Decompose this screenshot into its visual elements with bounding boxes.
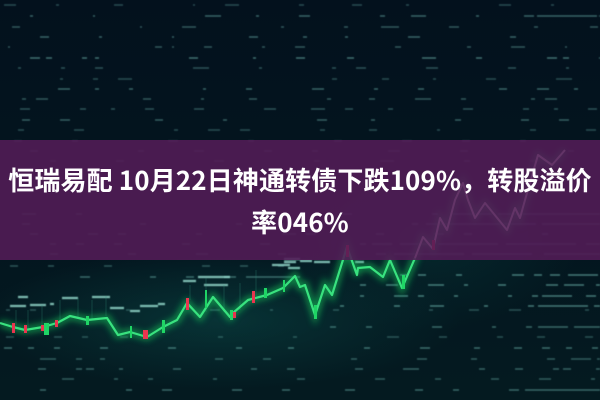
red candles xyxy=(12,240,435,339)
chart vertical traces xyxy=(16,270,256,328)
title: 恒瑞易配 10月22日神通转债下跌109%，转股溢价 xyxy=(8,160,592,198)
title: 率046% xyxy=(251,202,349,240)
candlesticks xyxy=(12,240,435,339)
price line glow xyxy=(0,150,565,337)
price line xyxy=(0,247,415,337)
green candles xyxy=(44,275,405,338)
chart labels: mint number clusters around the line xyxy=(10,259,364,311)
title xyxy=(8,160,592,240)
price line upper section xyxy=(415,150,565,258)
purple title band xyxy=(0,140,600,260)
